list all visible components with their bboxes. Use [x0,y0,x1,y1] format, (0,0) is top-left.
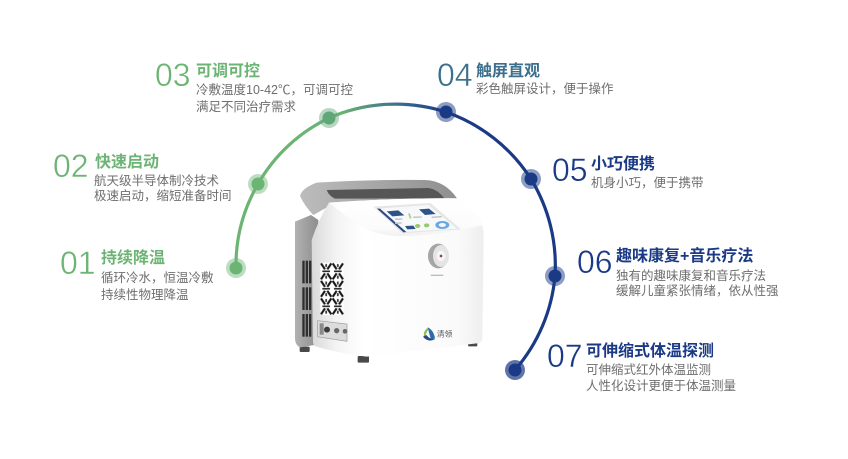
feature 06 [577,244,779,298]
feature 05 [552,152,704,190]
feature 05: 05 [552,152,588,188]
node 06 [545,266,565,286]
feature 01: 01 [60,245,96,281]
product device [295,180,484,363]
feature 01: 持续降温 [101,249,165,267]
feature 02: 航天级半导体制冷技术 [94,173,220,188]
feature 07 [547,338,736,393]
body top panel [329,198,483,236]
node 02 [248,174,268,194]
node 05 [521,169,541,189]
feature 06: 缓解儿童紧张情绪，依从性强 [616,283,779,298]
feature 06: 趣味康复+音乐疗法 [616,246,753,265]
feature 02: 02 [53,148,89,184]
feature 04: 04 [437,57,473,93]
side vents [302,261,311,337]
arc: blue segment [446,112,555,370]
brand logo [423,327,453,341]
feature 03: 满足不同治疗需求 [196,100,297,114]
node 01 [226,258,246,278]
feature 02: 极速启动，缩短准备时间 [94,188,232,203]
feature 03: 冷敷温度10-42℃，可调可控 [196,82,353,97]
front vent lattice [320,263,344,315]
device feet [300,342,477,363]
touch screen [373,203,461,233]
node 07 [505,360,525,380]
feature 01: 持续性物理降温 [101,287,189,302]
node 04 [436,102,456,122]
brand logo: 清领 [437,328,453,338]
feature 04 [437,57,614,96]
feature 07: 07 [547,338,583,374]
feature 06: 06 [577,244,613,280]
feature 07: 可伸缩式体温探测 [586,341,714,360]
handle opening [327,188,444,199]
feature 01: 循环冷水，恒温冷敷 [101,270,214,285]
feature 05: 机身小巧，便于携带 [591,175,704,190]
arc: gradient segment [329,104,446,118]
feature 02: 快速启动 [95,152,159,171]
curved timeline [236,104,555,370]
feature 02 [53,148,232,203]
feature 03: 03 [155,57,191,93]
feature 07: 可伸缩式红外体温监测 [586,362,711,377]
feature 03: 可调可控 [196,61,260,80]
feature 03 [155,57,353,114]
feature 07: 人性化设计更便于体温测量 [586,378,736,393]
feature 01 [60,245,214,302]
device handle [300,180,457,215]
temperature probe [428,244,449,276]
arc: green segment [236,118,329,268]
node 03 [319,108,339,128]
device body [312,198,484,357]
feature 05: 小巧便携 [591,154,655,173]
connector panel [318,321,347,341]
feature 04: 触屏直观 [476,61,540,80]
feature 04: 彩色触屏设计，便于操作 [476,81,614,96]
device rear side panel [295,215,318,347]
feature 06: 独有的趣味康复和音乐疗法 [616,268,766,283]
